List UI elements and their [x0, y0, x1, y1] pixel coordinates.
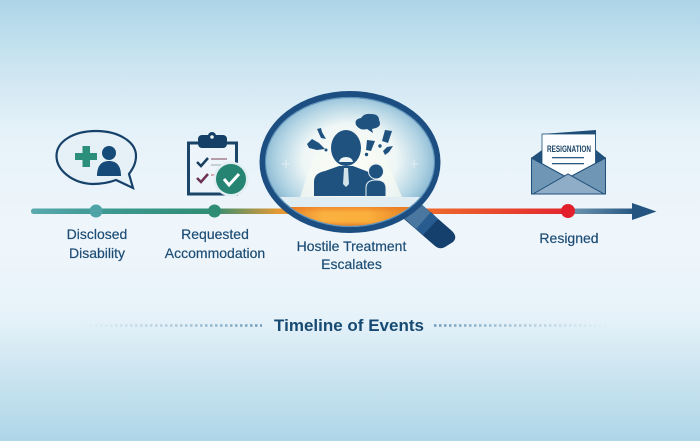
label: resigned: Resigned: [539, 230, 599, 246]
label: disclosed disability: Disability: [69, 245, 125, 261]
timeline line: [31, 208, 571, 214]
lens contents: [262, 98, 438, 231]
dotted divider left: [80, 324, 262, 327]
marker: resigned: [561, 204, 575, 218]
icon: small person: [366, 164, 386, 196]
glowing timeline band: [290, 207, 410, 226]
icon: lightning and exclamation marks: [307, 128, 393, 156]
icon: clipboard with check badge: [188, 132, 248, 196]
marker: requested accommodation: [208, 204, 221, 218]
magnifying glass: [262, 94, 455, 248]
arrow head: [632, 203, 656, 220]
handle: [403, 201, 455, 248]
label: hostile treatment escalates: Hostile Treatment: [297, 238, 406, 254]
icon: angry man: [314, 130, 376, 196]
title: timeline of events: Timeline of Events: [274, 316, 424, 335]
label: requested accommodation: Requested: [181, 226, 249, 242]
sparkle: right: [410, 160, 418, 168]
icon: speech bubble with medical cross and person: [56, 131, 136, 188]
lens rim: [262, 94, 438, 230]
marker: disclosed disability: [90, 204, 102, 218]
label: hostile treatment escalates: Escalates: [321, 256, 382, 272]
dotted divider right: [434, 324, 612, 327]
sparkle: left: [282, 160, 290, 168]
inner rim highlight: [266, 98, 434, 226]
icon: storm cloud: [356, 114, 380, 133]
label: disclosed disability: Disclosed: [67, 226, 127, 242]
label: requested accommodation: Accommodation: [165, 245, 265, 261]
arrow shaft: [572, 208, 636, 214]
icon: resignation letter in envelope: [531, 130, 606, 194]
icon: resignation letter in envelope: RESIGNATION: [547, 144, 591, 155]
